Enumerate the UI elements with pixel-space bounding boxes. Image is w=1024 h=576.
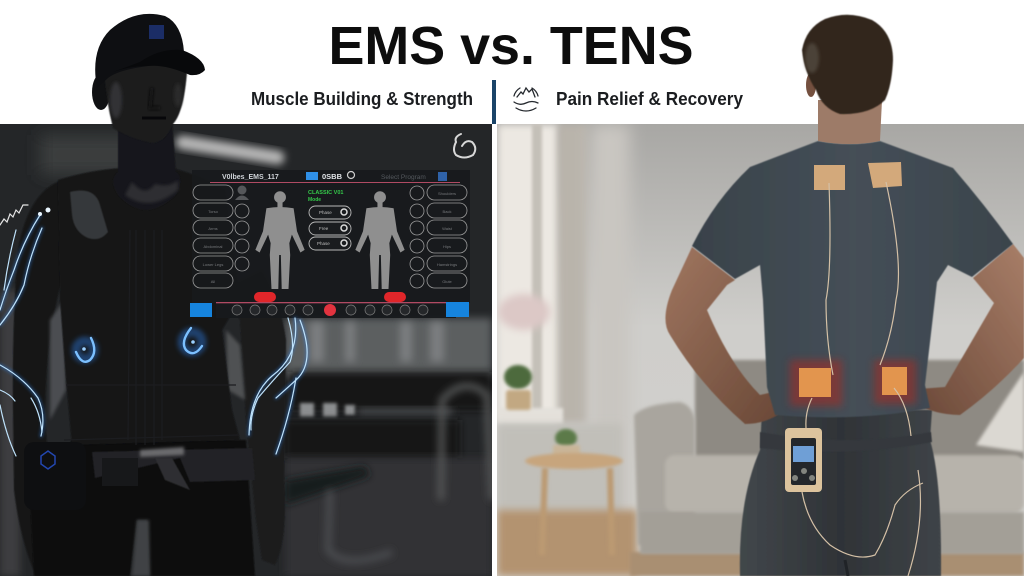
belt pouch <box>24 442 86 510</box>
subtitle: TENS benefit: Pain Relief & Recovery <box>556 89 743 109</box>
man: left arm <box>665 247 798 424</box>
left buttons <box>193 185 249 288</box>
button labels: Torso <box>208 209 219 214</box>
front body diagram <box>255 191 305 289</box>
back body diagram <box>355 191 405 289</box>
cap crown <box>95 14 184 88</box>
grey temple <box>805 43 819 73</box>
screen header text: V0lbes_EMS_117 <box>222 174 279 181</box>
cap logo <box>149 25 164 39</box>
control screen <box>190 170 470 318</box>
button labels: Back <box>443 209 451 214</box>
button labels: Abdominal <box>204 244 223 249</box>
blue side buttons <box>190 303 212 317</box>
bottom control icons <box>232 305 428 315</box>
right arm <box>222 270 286 565</box>
panel: EMS training scene <box>0 14 492 576</box>
hair <box>802 15 893 114</box>
TENS controller device <box>785 428 822 492</box>
button labels: Glute <box>442 279 453 284</box>
neck <box>113 120 180 210</box>
waistband <box>760 432 932 452</box>
pouch logo <box>41 451 55 469</box>
ear <box>806 73 816 97</box>
red heat glow <box>790 360 916 406</box>
electric wave lines <box>0 205 307 456</box>
red pills <box>254 292 276 302</box>
button labels: Lower Legs <box>203 262 223 267</box>
button labels: All <box>211 279 215 284</box>
center divider <box>492 80 496 124</box>
left arm <box>13 180 62 576</box>
button labels: Hips <box>443 244 451 249</box>
control screen: 0SBB <box>322 172 343 181</box>
man: t-shirt <box>692 141 1013 417</box>
control screen: Free <box>319 226 329 231</box>
man: trousers <box>740 410 941 576</box>
belt <box>92 448 255 482</box>
sofa <box>695 360 1024 460</box>
user icon <box>235 186 249 200</box>
window <box>497 124 559 414</box>
button labels: Hamstrings <box>437 262 457 267</box>
ear <box>92 74 110 110</box>
control screen: Phase <box>317 241 330 246</box>
vest straps and seams <box>64 230 238 445</box>
lead wires <box>802 182 923 576</box>
vest <box>58 168 240 445</box>
gap highlights beside vest <box>50 300 66 420</box>
button labels: Arms <box>208 226 218 231</box>
face <box>104 55 188 143</box>
plants and vases <box>498 294 550 330</box>
control screen: Select Program <box>381 174 426 181</box>
legs and hips <box>30 440 255 576</box>
head and cap <box>92 14 205 143</box>
blue muscle pad glows <box>76 332 202 359</box>
trouser seat seam <box>845 560 848 576</box>
green status text: CLASSIC V01 <box>308 190 343 196</box>
woman in EMS suit <box>13 14 286 576</box>
button labels <box>203 191 457 284</box>
man: right arm <box>905 244 1024 415</box>
right buttons <box>410 185 467 288</box>
icon: pain relief waves <box>514 88 538 111</box>
neck <box>818 100 882 144</box>
control screen: Mode <box>308 197 321 203</box>
eyes and lips <box>128 82 178 86</box>
thigh gap <box>132 520 150 576</box>
panel: TENS recovery scene <box>497 15 1024 576</box>
title: EMS vs. TENS <box>328 16 694 76</box>
center buttons <box>309 206 351 250</box>
window sill and lower wall <box>497 408 563 424</box>
blue halo under lines <box>0 215 307 454</box>
button labels: Waist <box>442 226 453 231</box>
control screen: Phase <box>319 210 332 215</box>
cap bill <box>113 50 205 75</box>
living room background <box>497 124 1024 576</box>
electrode pads <box>799 162 907 397</box>
floor <box>497 510 637 576</box>
cheek highlights <box>110 82 122 118</box>
icon: flexed arm logo <box>454 134 475 158</box>
man: neck and head <box>802 15 893 144</box>
button labels: Shoulders <box>438 191 456 196</box>
gym background <box>0 124 492 576</box>
shoulder sensors <box>38 208 50 216</box>
side table <box>555 429 577 447</box>
subtitle: EMS benefit: Muscle Building & Strength <box>251 89 473 109</box>
shoulder patches <box>70 191 108 239</box>
